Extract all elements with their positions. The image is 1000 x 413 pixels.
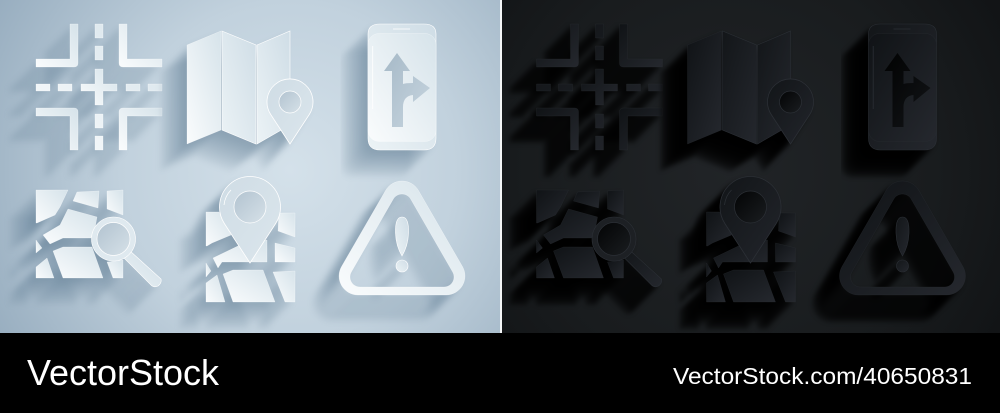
- panel: light background: [0, 0, 500, 333]
- panel: dark background: [502, 0, 1000, 333]
- footer band: [0, 333, 1000, 413]
- icon: dark map with location pin: [706, 177, 796, 302]
- icon: map with location pin: [206, 177, 295, 302]
- panel: dark icon set: [536, 24, 965, 302]
- icon: dark smartphone with route arrow: [868, 24, 936, 150]
- image id url: VectorStock.com/40650831: [673, 363, 972, 389]
- icon: warning triangle: [339, 181, 465, 295]
- panel: light icon set: [36, 24, 465, 302]
- icon: dark folded map with pin: [688, 31, 814, 144]
- icon: smartphone with route arrow: [368, 24, 436, 150]
- icon: dark map with magnifier: [536, 190, 662, 287]
- icon: dark warning triangle: [840, 181, 965, 295]
- icon: dark crossroads: [536, 24, 662, 150]
- icon: map with magnifier: [36, 190, 161, 287]
- brand name: VectorStock: [27, 352, 220, 393]
- icon: folded map with pin: [187, 31, 313, 144]
- icon: crossroads: [36, 24, 162, 150]
